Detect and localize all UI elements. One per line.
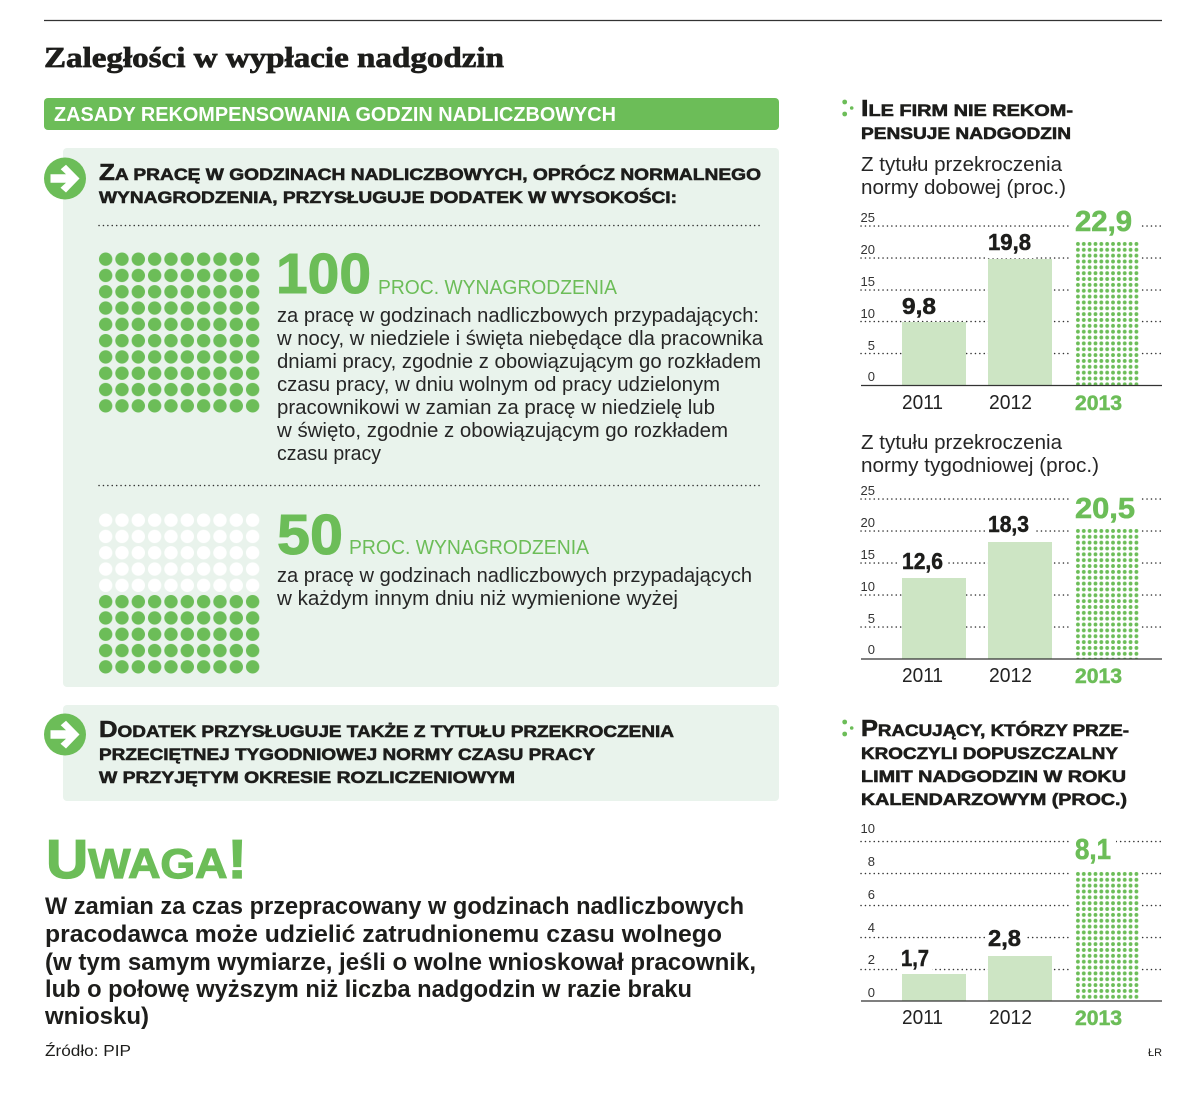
year labels: 2013 [1075, 665, 1122, 688]
axis labels: 15 [861, 274, 875, 289]
axis labels: 5 [868, 338, 875, 353]
year labels: 2012 [989, 1007, 1032, 1029]
year labels: 2011 [902, 1007, 943, 1029]
text block: warning [44, 893, 756, 1030]
panel text: PRZECIĘTNEJ TYGODNIOWEJ NORMY CZASU PRACY [99, 745, 596, 764]
rate: 100 percent: PROC. WYNAGRODZENIA [378, 277, 618, 299]
rate: 50 percent [277, 503, 590, 567]
axis labels: 20 [861, 515, 875, 530]
axis labels [861, 821, 875, 1000]
value 2012: 18,3 [988, 511, 1029, 537]
value 2011: 9,8 [902, 293, 936, 319]
rate: 50 percent: 50 [277, 503, 343, 567]
text block: warning: wniosku) [44, 1003, 149, 1030]
heading: companies not compensating: PENSUJE NADGODZIN [861, 124, 1071, 143]
value 2012: 2,8 [988, 925, 1021, 951]
bar 2011 [902, 322, 966, 385]
text block: warning: lub o połowę wyższym niż liczba nadgodzin w razie braku [45, 976, 692, 1003]
value 2011: 12,6 [902, 548, 943, 574]
panel text: DODATEK PRZYSŁUGUJE TAKŻE Z TYTUŁU PRZEKROCZENIA [99, 716, 674, 742]
axis labels [861, 483, 875, 657]
value 2011: 1,7 [901, 945, 929, 971]
text block: warning: pracodawca może udzielić zatrudnionemu czasu wolnego [45, 921, 722, 948]
heading: companies not compensating [861, 95, 1073, 143]
bar 2011 [902, 578, 966, 659]
heading: workers exceeding limit [861, 715, 1129, 809]
bar 2013 [1075, 871, 1139, 1001]
bar 2012 [988, 542, 1052, 659]
text block: 50 percent conditions: w każdym innym dniu niż wymienione wyżej [276, 588, 678, 610]
year labels: 2013 [1075, 392, 1122, 415]
text block: 100 percent conditions: pracownikowi w zamian za pracę w niedzielę lub [277, 397, 715, 419]
chart subtitle: weekly norm: normy tygodniowej (proc.) [861, 455, 1099, 477]
text block: 100 percent conditions [276, 305, 764, 465]
year labels [902, 665, 1122, 688]
bar 2011 [902, 974, 966, 1001]
dot grid: 50 percent [98, 512, 261, 675]
title: Zaległości w wypłacie nadgodzin [44, 42, 504, 74]
value 2013: 8,1 [1075, 834, 1111, 866]
chart subtitle: daily norm: normy dobowej (proc.) [861, 177, 1066, 199]
section banner: ZASADY REKOMPENSOWANIA GODZIN NADLICZBOWYCH [54, 104, 616, 126]
rate: 100 percent: 100 [276, 242, 371, 306]
icon: bullet dots [842, 720, 854, 736]
year labels: 2011 [902, 392, 943, 414]
panel heading: WYNAGRODZENIA, PRZYSŁUGUJE DODATEK W WYSOKOŚCI: [99, 188, 677, 207]
year labels: 2012 [989, 665, 1032, 687]
heading: workers exceeding limit: LIMIT NADGODZIN W ROKU [861, 767, 1126, 786]
text block: 50 percent conditions: za pracę w godzinach nadliczbowych przypadających [277, 565, 752, 587]
bar 2013 [1075, 528, 1139, 659]
text block: 100 percent conditions: dniami pracy, zgodnie z obowiązującym go rozkładem [277, 351, 761, 373]
axis labels: 2 [868, 952, 875, 967]
heading: companies not compensating: ILE FIRM NIE REKOM- [861, 95, 1073, 121]
icon: arrow circle [44, 714, 86, 756]
axis labels: 0 [868, 369, 875, 384]
text block: 50 percent conditions [276, 565, 752, 610]
value 2013: 20,5 [1075, 493, 1135, 525]
year labels: 2012 [989, 392, 1032, 414]
bar chart: weekly norm [861, 483, 1162, 688]
panel text [99, 716, 674, 787]
text block: 100 percent conditions: w nocy, w niedziele i święta niebędące dla pracownika [276, 328, 764, 350]
axis labels: 10 [861, 579, 875, 594]
bar 2012 [988, 956, 1052, 1001]
heading: warning: UWAGA! [46, 828, 247, 890]
axis labels: 25 [861, 483, 875, 498]
chart subtitle: daily norm [861, 154, 1066, 199]
text block: warning: W zamian za czas przepracowany w godzinach nadliczbowych [45, 893, 744, 920]
text block: 100 percent conditions: czasu pracy [277, 443, 381, 465]
bar 2013 [1075, 241, 1139, 385]
source: Źródło: PIP [45, 1041, 131, 1060]
chart subtitle: weekly norm: Z tytułu przekroczenia [861, 432, 1063, 454]
year labels: 2013 [1075, 1007, 1122, 1030]
text block: 100 percent conditions: w święto, zgodnie z obowiązującym go rozkładem [276, 420, 728, 442]
axis labels: 25 [861, 210, 875, 225]
axis labels [861, 210, 875, 384]
bar chart: daily norm [861, 205, 1162, 415]
bar chart: annual limit [861, 821, 1162, 1030]
text block: warning: (w tym samym wymiarze, jeśli o wolne wnioskował pracownik, [45, 949, 756, 976]
axis labels: 0 [868, 985, 875, 1000]
axis labels: 10 [861, 306, 875, 321]
year labels [902, 392, 1122, 415]
panel text: W PRZYJĘTYM OKRESIE ROZLICZENIOWYM [99, 768, 515, 787]
axis labels: 4 [868, 920, 875, 935]
section banner [44, 98, 779, 130]
chart subtitle: weekly norm [861, 432, 1099, 477]
axis labels: 0 [868, 642, 875, 657]
axis labels: 5 [868, 611, 875, 626]
year labels: 2011 [902, 665, 943, 687]
rate: 50 percent: PROC. WYNAGRODZENIA [349, 537, 590, 559]
axis labels: 8 [868, 854, 875, 869]
axis labels: 20 [861, 242, 875, 257]
rate: 100 percent [276, 242, 618, 306]
year labels [902, 1007, 1122, 1030]
dot grid: 100 percent [98, 251, 261, 414]
panel: overtime supplement rates [44, 148, 779, 687]
axis labels: 10 [861, 821, 875, 836]
value 2013: 22,9 [1075, 206, 1132, 238]
panel heading [99, 159, 761, 207]
axis labels: 15 [861, 547, 875, 562]
value 2012: 19,8 [988, 229, 1031, 255]
heading: workers exceeding limit: PRACUJĄCY, KTÓRZY PRZE- [861, 715, 1129, 741]
bar 2012 [988, 259, 1052, 385]
heading: workers exceeding limit: KROCZYLI DOPUSZCZALNY [861, 744, 1119, 763]
panel heading: ZA PRACĘ W GODZINACH NADLICZBOWYCH, OPRÓCZ NORMALNEGO [99, 159, 761, 185]
axis labels: 6 [868, 887, 875, 902]
author credit: ŁR [1148, 1047, 1162, 1059]
heading: workers exceeding limit: KALENDARZOWYM (PROC.) [861, 790, 1127, 809]
text block: 100 percent conditions: za pracę w godzinach nadliczbowych przypadających: [277, 305, 759, 327]
icon: bullet dots [842, 100, 854, 116]
icon: arrow circle [44, 158, 86, 200]
chart subtitle: daily norm: Z tytułu przekroczenia [861, 154, 1063, 176]
text block: 100 percent conditions: czasu pracy, w dniu wolnym od pracy udzielonym [277, 374, 720, 396]
panel: additional supplement [44, 705, 779, 801]
